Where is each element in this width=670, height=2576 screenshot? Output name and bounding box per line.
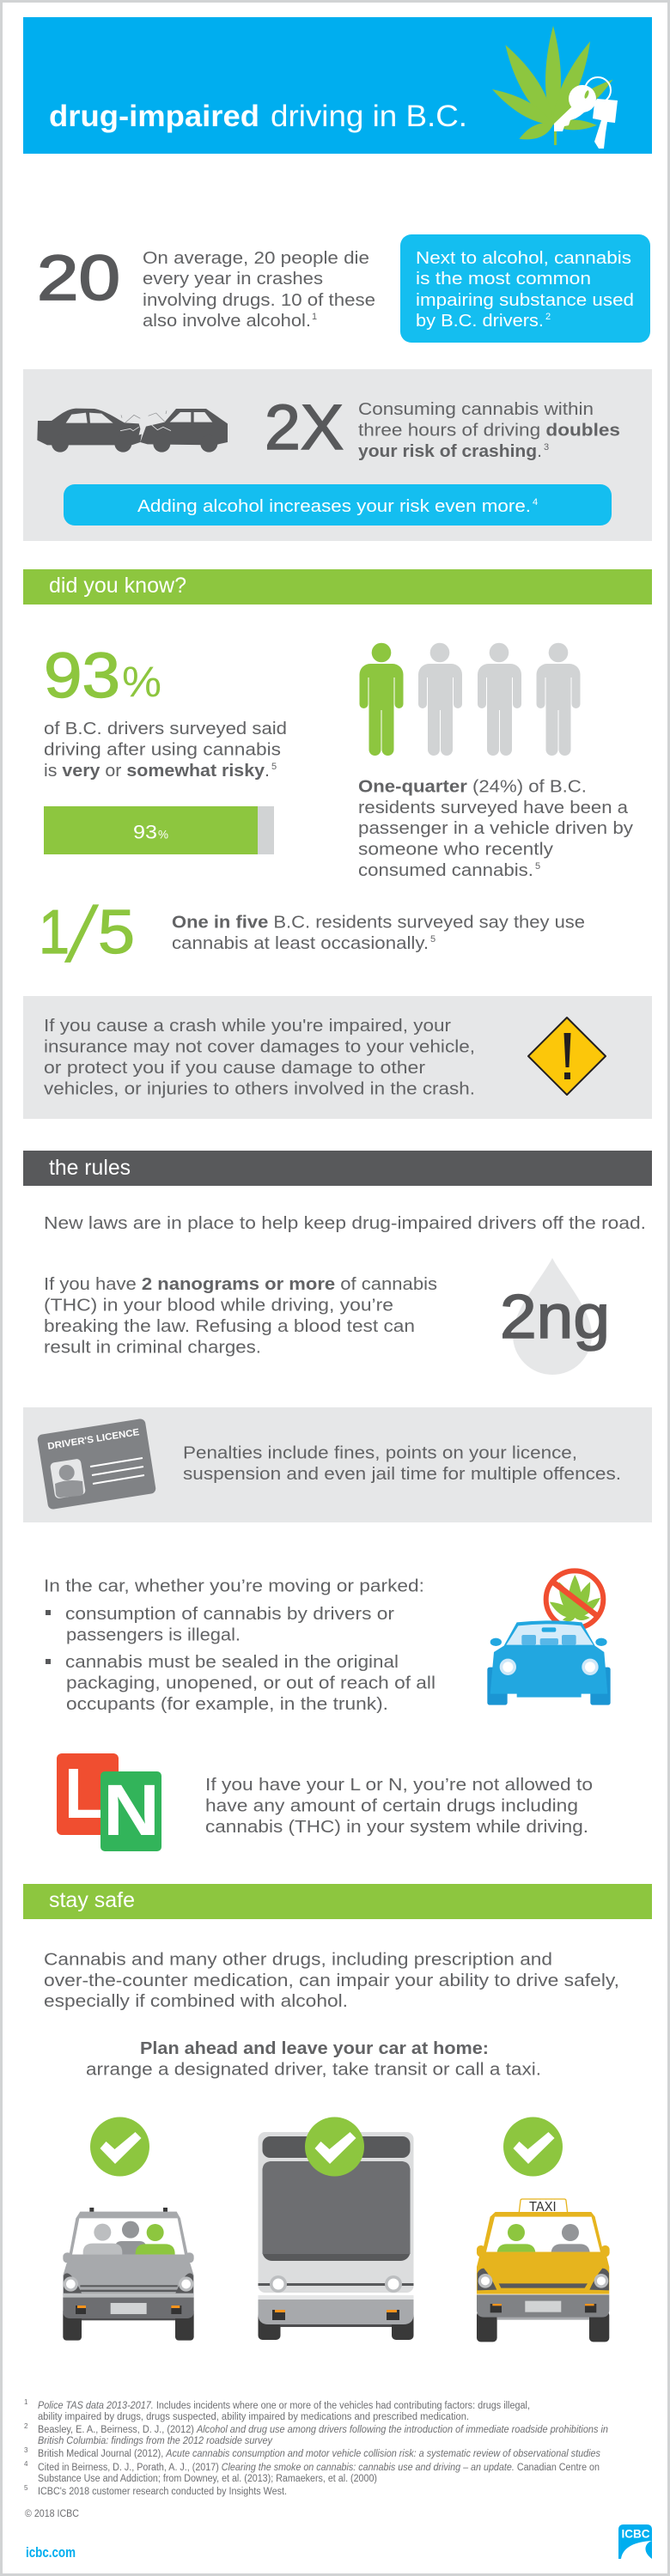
- footnotes: 5: [24, 2484, 28, 2492]
- icon: car with designated driver: [63, 2208, 194, 2341]
- panel: insurance warning: or protect you if you cause damage to other: [44, 1058, 425, 1078]
- footnotes: 4: [24, 2460, 28, 2468]
- 2 nanograms text: result in criminal charges.: [44, 1338, 261, 1357]
- stat description: On average, 20 people die: [143, 248, 369, 268]
- one-quarter text: [358, 776, 634, 880]
- stat: 93 percent: 93: [44, 640, 120, 711]
- stat description: [143, 248, 375, 331]
- website: icbc.com: [26, 2544, 76, 2561]
- title: drug-impaired: [49, 100, 259, 133]
- one-quarter text: someone who recently: [358, 840, 554, 859]
- in the car rules list: cannabis must be sealed in the original: [65, 1652, 399, 1672]
- bar chart: 93 percent: [44, 806, 274, 854]
- footnotes: Police TAS data 2013-2017. Includes incidents where one or more of the vehicles had contributing factors: drugs illegal,: [38, 2401, 530, 2411]
- 93 percent description: of B.C. drivers surveyed said: [44, 719, 287, 738]
- one-quarter text: 5: [535, 861, 540, 872]
- header banner: [23, 17, 652, 154]
- panel: insurance warning: vehicles, or injuries to others involved in the crash.: [44, 1078, 475, 1099]
- crash risk text: your risk of crashing .: [358, 441, 542, 461]
- 2 nanograms text: [44, 1274, 437, 1357]
- icon: two cars crashing: [37, 409, 228, 453]
- 93 percent description: driving after using cannabis: [44, 740, 281, 759]
- icon: L and N signs: [57, 1753, 161, 1851]
- panel: insurance warning: If you cause a crash while you're impaired, your: [44, 1016, 451, 1036]
- bar chart: 93 percent: 93: [133, 821, 157, 843]
- footnotes: Beasley, E. A., Beirness, D. J., (2012) Alcohol and drug use among drivers following the introduction of immediate roadside prohibitions in: [38, 2425, 608, 2435]
- L and N text: If you have your L or N, you’re not allowed to: [205, 1775, 593, 1795]
- one-quarter text: One-quarter (24%) of B.C.: [358, 776, 587, 797]
- icon: warning sign: [528, 1018, 606, 1095]
- icon: driver's licence: DRIVER'S LICENCE: [47, 1427, 140, 1452]
- stay safe text: over-the-counter medication, can impair your ability to drive safely,: [44, 1971, 619, 1990]
- stat: one in five: 5: [98, 898, 135, 967]
- logo: ICBC: [618, 2524, 652, 2559]
- footnotes: ICBC's 2018 customer research conducted by Insights West.: [38, 2487, 287, 2497]
- one-quarter text: passenger in a vehicle driven by: [358, 818, 634, 838]
- stat: 93 percent: [44, 640, 287, 781]
- stat description: also involve alcohol.: [143, 311, 311, 331]
- stat: 20 people die: [37, 242, 375, 331]
- 2 nanograms text: (THC) in your blood while driving, you’re: [44, 1295, 393, 1315]
- section heading: did you know: [23, 569, 652, 605]
- section heading: stay safe: stay safe: [49, 1888, 135, 1912]
- footnotes: British Columbia: findings from the 2012 roadside survey: [38, 2436, 273, 2446]
- one-quarter text: residents surveyed have been a: [358, 798, 629, 817]
- plan ahead text: Plan ahead and leave your car at home:: [140, 2038, 489, 2058]
- plan ahead text: [86, 2038, 541, 2080]
- logo: ICBC: ICBC: [622, 2528, 650, 2540]
- callout: most common impairing substance: by B.C. drivers.: [416, 311, 544, 331]
- icon: cannabis leaf and keys: [489, 26, 618, 149]
- stat: one in five: 1: [39, 898, 70, 967]
- crash risk text: three hours of driving doubles: [358, 421, 620, 440]
- in the car rules list: consumption of cannabis by drivers or: [65, 1604, 394, 1624]
- callout: most common impairing substance: Next to alcohol, cannabis: [416, 248, 631, 268]
- crash risk text: [358, 399, 620, 461]
- stat: one in five: /: [61, 890, 102, 979]
- in the car rules list: packaging, unopened, or out of reach of all: [66, 1673, 436, 1693]
- icon: check mark for bus: [305, 2117, 364, 2176]
- one in five text: [172, 912, 585, 953]
- one in five text: 5: [430, 934, 436, 945]
- 2 nanograms text: If you have 2 nanograms or more of cannabis: [44, 1274, 437, 1294]
- L and N text: cannabis (THC) in your system while driving.: [205, 1817, 588, 1837]
- icon: taxi: [477, 2199, 610, 2342]
- crash risk text: 3: [544, 442, 549, 453]
- footnotes: 2: [24, 2422, 28, 2430]
- in the car rules list: [44, 1577, 436, 1714]
- stat description: every year in crashes: [143, 269, 323, 289]
- L and N text: [205, 1775, 593, 1837]
- stat: 2X: 2X: [265, 392, 344, 463]
- 93 percent description: is very or somewhat risky .: [44, 761, 270, 781]
- panel: crash risk: [23, 369, 652, 541]
- penalties text: suspension and even jail time for multiple offences.: [183, 1464, 621, 1484]
- 93 percent description: [44, 719, 287, 781]
- section heading: did you know: did you know?: [49, 574, 186, 598]
- callout: most common impairing substance: 2: [545, 312, 551, 322]
- stat: 93 percent: %: [122, 658, 161, 706]
- footnotes: ability impaired by drugs, drugs suspected, ability impaired by medications and prescribed medication.: [38, 2412, 469, 2422]
- callout: most common impairing substance: impairing substance used: [416, 290, 634, 310]
- callout: most common impairing substance: is the most common: [416, 269, 591, 289]
- icon: no cannabis sign over blue car: [487, 1571, 611, 1705]
- stat description: 1: [312, 312, 317, 322]
- section heading: the rules: the rules: [49, 1156, 131, 1180]
- taxi roof sign: [519, 2199, 568, 2215]
- new laws text: New laws are in place to help keep drug-impaired drivers off the road.: [44, 1213, 646, 1233]
- callout: most common impairing substance: [400, 234, 650, 343]
- icon: driver's licence: [37, 1419, 156, 1510]
- one in five text: cannabis at least occasionally.: [172, 933, 429, 953]
- callout: alcohol increases risk: 4: [533, 497, 538, 507]
- section heading: the rules: [23, 1151, 652, 1186]
- stay safe text: especially if combined with alcohol.: [44, 1991, 348, 2011]
- in the car rules list: occupants (for example, in the trunk).: [66, 1694, 388, 1714]
- icon: blood drop with 2ng: [500, 1258, 610, 1375]
- panel: penalties: [23, 1407, 652, 1522]
- one in five text: One in five B.C. residents surveyed say they use: [172, 912, 585, 933]
- icon: blood drop with 2ng: 2ng: [500, 1283, 610, 1352]
- in the car rules list: passengers is illegal.: [66, 1625, 241, 1645]
- panel: insurance warning: insurance may not cover damages to your vehicle,: [44, 1037, 475, 1056]
- footnotes: British Medical Journal (2012), Acute cannabis consumption and motor vehicle collision risk: a systematic review of observational studies: [38, 2449, 600, 2459]
- 2 nanograms text: breaking the law. Refusing a blood test can: [44, 1316, 415, 1336]
- icon: one of four people highlighted: [359, 643, 581, 756]
- icon: check mark for taxi: [503, 2117, 563, 2176]
- in the car rules list: In the car, whether you’re moving or parked:: [44, 1577, 424, 1595]
- panel: insurance warning: [23, 996, 652, 1119]
- plan ahead text: arrange a designated driver, take transit or call a taxi.: [86, 2059, 541, 2080]
- stat: one in five: [39, 890, 585, 979]
- 93 percent description: 5: [271, 762, 277, 772]
- footnotes: [24, 2398, 608, 2497]
- footnotes: 3: [24, 2446, 28, 2454]
- footnotes: 1: [24, 2398, 28, 2406]
- title: [49, 100, 467, 133]
- title: driving in B.C.: [271, 100, 467, 133]
- icon: L and N signs: N: [103, 1770, 160, 1850]
- icon: check mark for car: [90, 2117, 149, 2176]
- stay safe text: [44, 1949, 619, 2011]
- callout: alcohol increases risk: [64, 484, 612, 526]
- icon: L and N signs: L: [64, 1753, 104, 1833]
- penalties text: [183, 1443, 621, 1484]
- footnotes: Substance Use and Addiction; from Downey, et al. (2013); Ramaekers, et al. (2000): [38, 2474, 377, 2484]
- bar chart: 93 percent: %: [158, 828, 168, 841]
- stay safe text: Cannabis and many other drugs, including prescription and: [44, 1949, 552, 1970]
- taxi roof sign: TAXI: [529, 2200, 557, 2215]
- copyright: © 2018 ICBC: [25, 2509, 79, 2519]
- callout: alcohol increases risk: Adding alcohol increases your risk even more.: [137, 496, 531, 516]
- stat: 20 people die: 20: [37, 242, 120, 313]
- penalties text: Penalties include fines, points on your licence,: [183, 1443, 577, 1463]
- footnotes: Cited in Beirness, D. J., Porath, A. J., (2017) Clearing the smoke on cannabis: cannabis use and driving – an update. Canadian Centre on: [38, 2463, 600, 2473]
- crash risk text: Consuming cannabis within: [358, 399, 594, 419]
- section heading: stay safe: [23, 1884, 652, 1919]
- one-quarter text: consumed cannabis.: [358, 860, 533, 880]
- icon: transit bus: [258, 2132, 414, 2340]
- stat description: involving drugs. 10 of these: [143, 290, 375, 310]
- L and N text: have any amount of certain drugs including: [205, 1796, 578, 1815]
